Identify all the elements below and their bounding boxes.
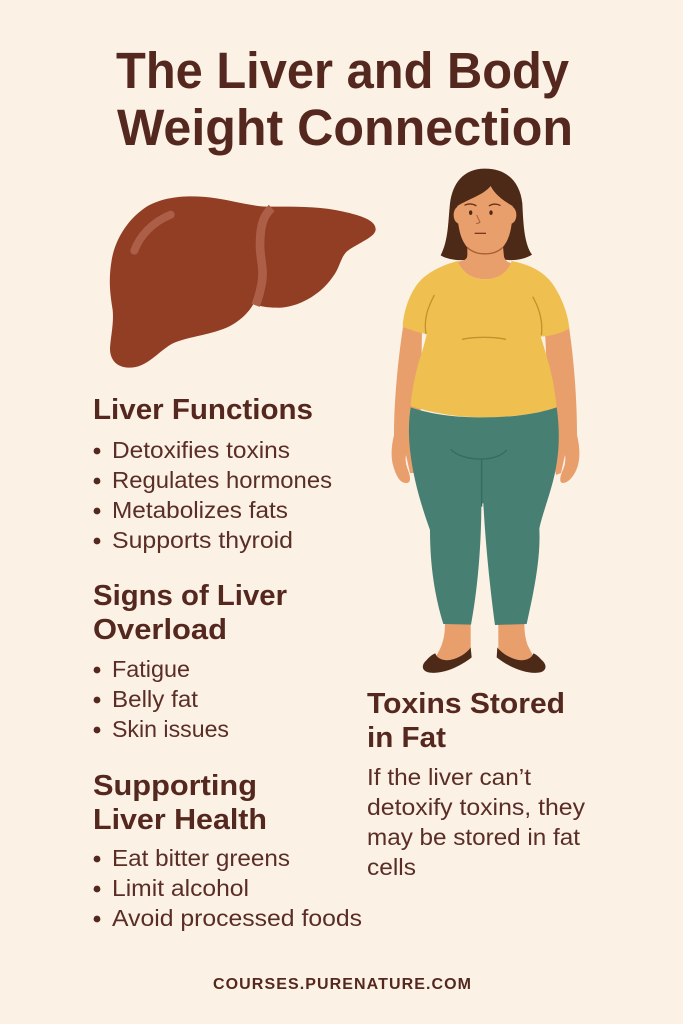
heading: signs of liver overload: Signs of Liver (93, 580, 287, 612)
text block: toxins explanation: may be stored in fat (367, 824, 581, 850)
list: signs: Belly fat (112, 686, 199, 712)
list: signs (94, 656, 229, 742)
list: liver functions (94, 437, 332, 553)
shirt (403, 261, 569, 417)
list: supporting (94, 845, 362, 931)
list: liver functions: Supports thyroid (112, 527, 293, 553)
title: Weight Connection (117, 99, 573, 156)
arms (392, 327, 579, 483)
heading: supporting liver health: Liver Health (93, 804, 267, 836)
list: liver functions: Metabolizes fats (112, 497, 288, 523)
text block: toxins explanation: detoxify toxins, they (367, 794, 586, 820)
hair (441, 169, 532, 260)
feet and shoes (423, 623, 545, 673)
heading: signs of liver overload (93, 580, 287, 646)
list: supporting: Avoid processed foods (112, 905, 362, 931)
text block: toxins explanation: If the liver can’t (367, 764, 532, 790)
heading: toxins stored in fat (367, 688, 565, 754)
title (116, 42, 573, 156)
title: The Liver and Body (116, 42, 570, 99)
footer url: COURSES.PURENATURE.COM (213, 976, 471, 993)
head and face (454, 186, 516, 254)
list: signs: Fatigue (112, 656, 190, 682)
heading: supporting liver health: Supporting (93, 770, 257, 802)
heading: liver functions: Liver Functions (93, 394, 313, 426)
text block: toxins explanation: cells (367, 854, 416, 880)
neck (458, 243, 512, 279)
icon: liver (110, 196, 376, 368)
heading: signs of liver overload: Overload (93, 614, 227, 646)
list: supporting: Limit alcohol (112, 875, 249, 901)
text block: toxins explanation (367, 764, 586, 880)
section: liver functions (93, 394, 332, 553)
illustration: woman (392, 169, 579, 673)
section: supporting liver health (93, 770, 362, 931)
list: liver functions: Regulates hormones (112, 467, 332, 493)
list: liver functions: Detoxifies toxins (112, 437, 290, 463)
section: toxins stored in fat (367, 688, 586, 880)
list: signs: Skin issues (112, 716, 229, 742)
heading: toxins stored in fat: in Fat (367, 722, 446, 754)
list: supporting: Eat bitter greens (112, 845, 290, 871)
trousers (409, 407, 559, 625)
heading: supporting liver health (93, 770, 267, 836)
heading: toxins stored in fat: Toxins Stored (367, 688, 565, 720)
section: signs of liver overload (93, 580, 287, 742)
